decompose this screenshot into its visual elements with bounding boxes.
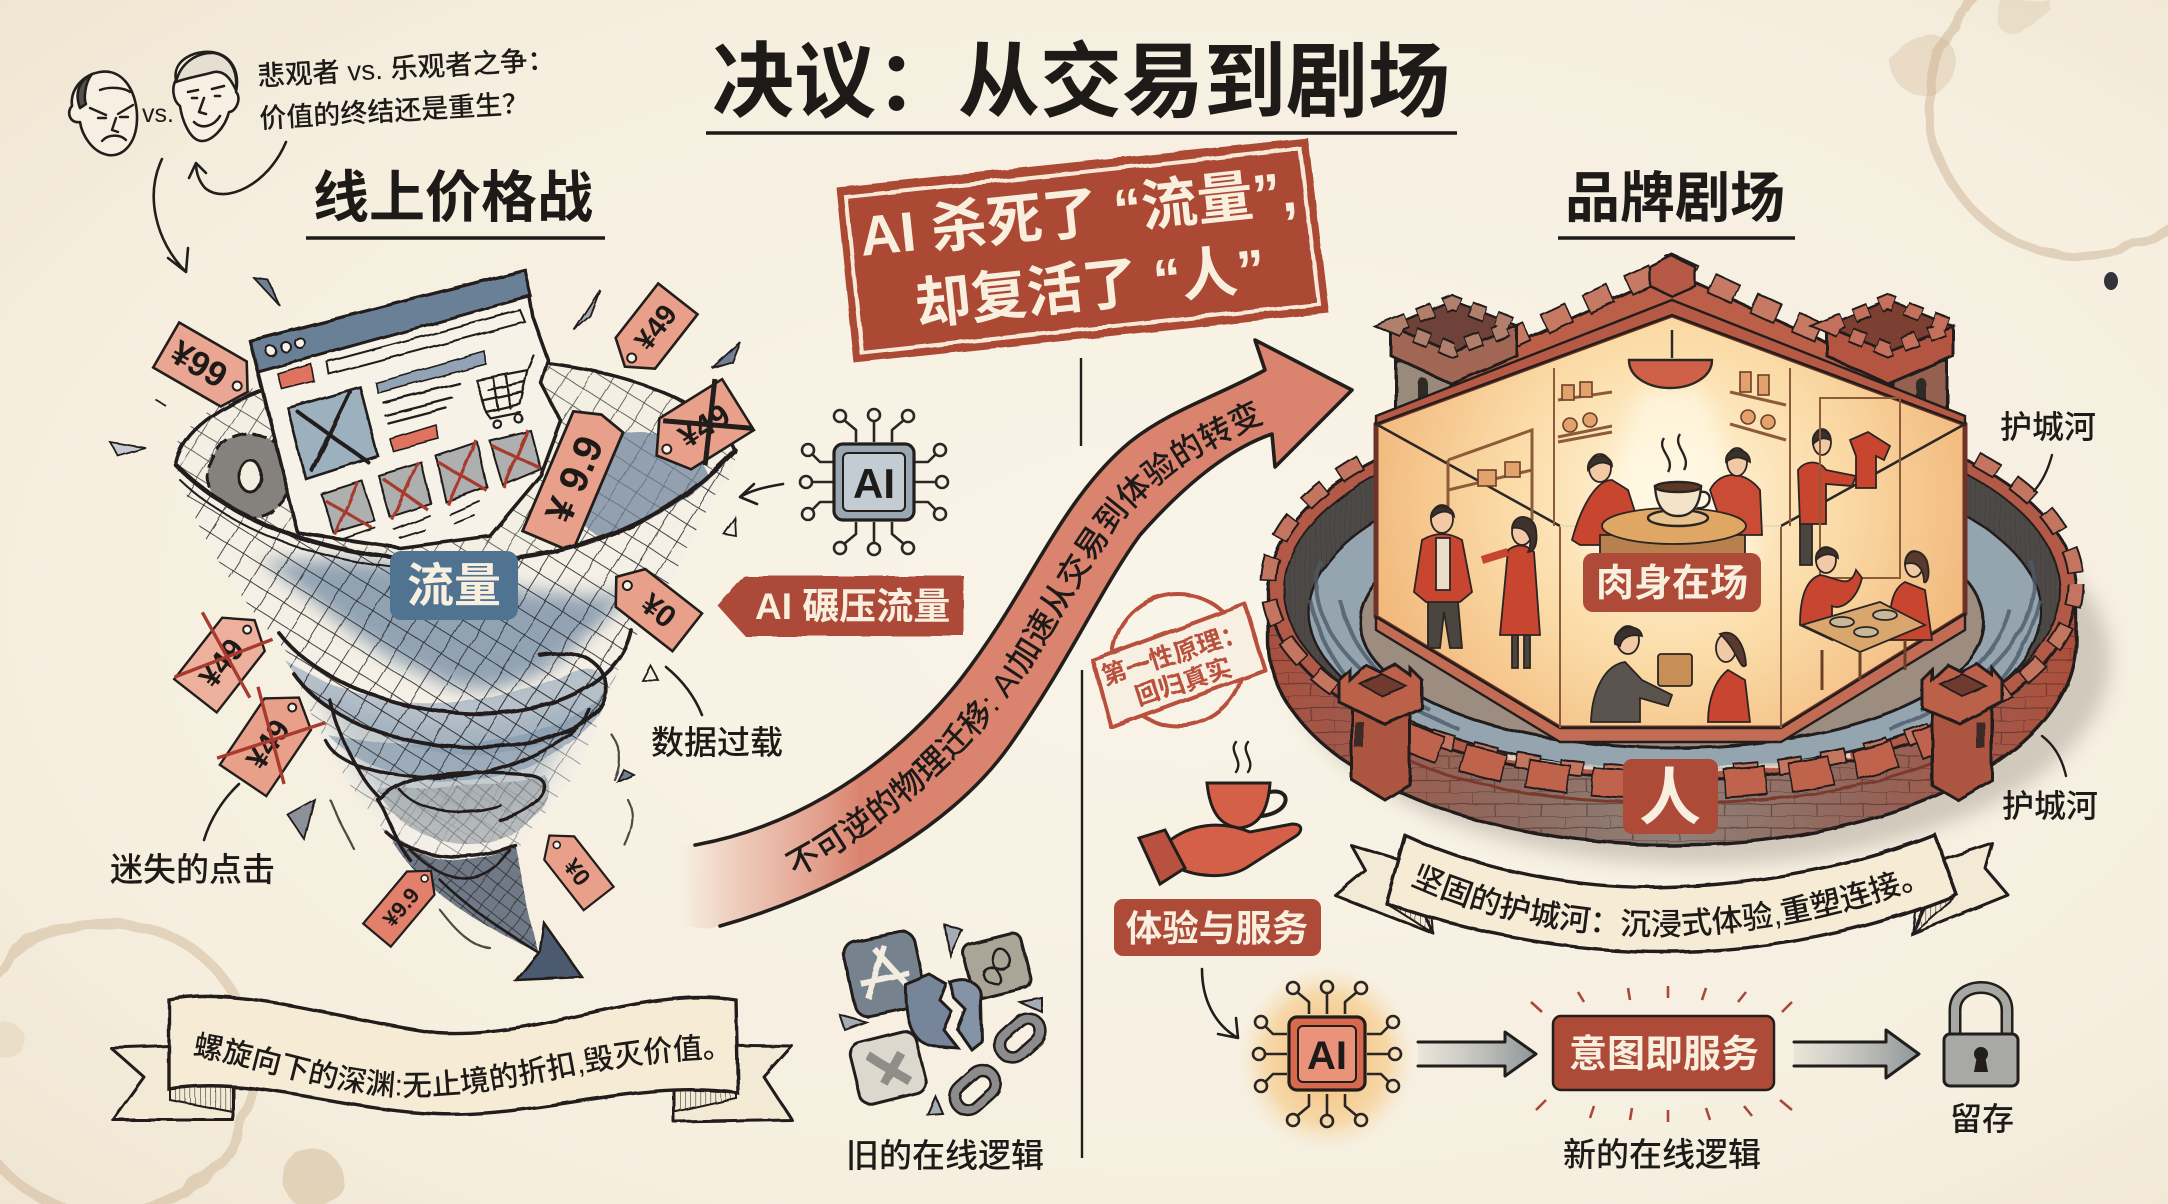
outer wall — [1268, 590, 2076, 845]
title: 决议：从交易到剧场 — [712, 37, 1450, 128]
front merlons — [1402, 735, 1945, 785]
label pill: traffic: 流量 — [407, 559, 501, 612]
shards — [110, 278, 740, 840]
label box: people: 人 — [1639, 764, 1701, 833]
label: old online logic: 旧的在线逻辑 — [846, 1137, 1044, 1174]
label pill: physically present: 肉身在场 — [1596, 563, 1748, 605]
icon: shopping cart — [476, 356, 534, 428]
ribbon: spiral abyss: 螺旋向下的深渊:无止境的折扣,毁灭价值。 — [194, 1032, 714, 1098]
label: moat bottom — [2002, 736, 2098, 824]
icon: optimist face — [173, 52, 238, 141]
arrow: chip to intent — [1418, 1032, 1536, 1076]
stamp: first principles — [1093, 594, 1265, 727]
stamp: first principles: 第一性原理： — [1098, 618, 1249, 691]
ribbon: spiral abyss — [110, 994, 794, 1124]
label: moat top — [2000, 409, 2096, 491]
people: gift exchange — [1591, 626, 1750, 722]
caption: 悲观者 vs. 乐观者之争： — [257, 44, 556, 92]
broken chain — [949, 1013, 1046, 1115]
pessimist vs optimist note: 价值的终结还是重生？ — [259, 88, 530, 134]
bandage tile — [847, 1029, 929, 1107]
funnel front — [176, 450, 735, 980]
people: left pane pair — [1414, 505, 1540, 668]
box: intent is service: 意图即服务 — [1569, 1034, 1759, 1076]
label pill: experience and service: 体验与服务 — [1126, 908, 1308, 949]
label: lost clicks: 迷失的点击 — [110, 851, 275, 888]
front right tower — [1932, 705, 1992, 800]
right tower crown — [1827, 326, 1953, 384]
tag: crossed ¥49: ¥49 — [672, 396, 736, 455]
back merlons — [1268, 394, 2076, 774]
heading: online price war: 线上价格战 — [313, 166, 593, 229]
center divider — [1081, 358, 1082, 1158]
icon: padlock — [1944, 988, 2018, 1086]
label pill: physically present — [1583, 553, 1761, 612]
gear — [208, 434, 292, 518]
left tower crown — [1391, 326, 1517, 384]
tag: ¥49 — [605, 284, 698, 382]
arrow: down to tornado — [154, 159, 188, 272]
tag: ¥0 small: ¥0 — [558, 854, 595, 891]
spiral arrowhead — [516, 923, 582, 980]
tag: ¥9.9 large: ¥ 9.9 — [537, 430, 613, 529]
arrow: back to optimist — [189, 142, 286, 194]
heading: brand theatre: 品牌剧场 — [1565, 167, 1785, 229]
AI chip: AI — [853, 460, 895, 507]
tag: crossed ¥49 — [639, 376, 756, 484]
icon: coffee cup with steam — [1648, 434, 1710, 526]
tag: ¥99: ¥99 — [164, 333, 234, 396]
big transition arrow — [691, 338, 1392, 966]
tag: crossed ¥49 left: ¥49 — [192, 632, 251, 694]
ink dot — [2104, 272, 2118, 290]
label: data overload — [651, 667, 783, 761]
fragments — [840, 925, 1042, 1115]
ribbon: strong moat — [1334, 832, 2010, 954]
browser window — [250, 270, 561, 548]
label pill: traffic — [390, 551, 518, 620]
tag: AI crushes traffic: AI 碾压流量 — [755, 586, 950, 627]
label pill: experience and service — [1114, 899, 1321, 956]
front left tower — [1352, 705, 1410, 800]
infinity tile — [961, 932, 1033, 1000]
people: coffee table — [1572, 448, 1762, 560]
shelves — [1448, 392, 1786, 520]
red stamp banner: AI 杀死了 “流量”, — [857, 159, 1299, 268]
broken tile — [906, 975, 958, 1048]
label: retention: 留存 — [1950, 1101, 2014, 1137]
tag: ¥0 — [602, 558, 702, 651]
stamp: first principles: 回归真实 — [1132, 654, 1235, 711]
tag: ¥49: ¥49 — [629, 299, 684, 357]
rim front — [176, 450, 735, 562]
label: moat top: 护城河 — [2000, 409, 2096, 445]
label: moat bottom: 护城河 — [2002, 788, 2098, 824]
icon: hand holding cup — [1139, 742, 1301, 884]
arrow: intent to retention — [1794, 1030, 1919, 1078]
pessimist vs optimist note — [69, 44, 556, 272]
label: data overload: 数据过载 — [651, 724, 783, 761]
ground shadow — [1290, 455, 2110, 865]
tag: ¥9.9 small — [363, 859, 445, 947]
back merlons outline — [1268, 394, 2076, 774]
label: new online logic: 新的在线逻辑 — [1563, 1136, 1761, 1173]
front merlons outline — [1402, 735, 1945, 785]
tag: ¥99 — [153, 322, 261, 415]
tag: ¥9.9 small: ¥9.9 — [378, 883, 425, 932]
hexagonal room — [1376, 300, 1965, 742]
tag: ¥0: ¥0 — [634, 586, 683, 635]
tag: ¥9.9 large — [523, 404, 626, 552]
tag: crossed ¥49 second — [210, 675, 329, 801]
label box: people — [1623, 759, 1718, 834]
icon: pessimist face — [69, 72, 137, 155]
tornado illustration — [110, 270, 756, 980]
tag: ¥0 small — [534, 824, 614, 910]
people: dining — [1800, 547, 1932, 690]
moat — [1309, 454, 2041, 770]
label: lost clicks — [110, 784, 275, 888]
back roof wall — [1455, 272, 1890, 400]
new online logic flow — [1239, 966, 2018, 1173]
box: intent is service — [1531, 986, 1792, 1122]
vs label: vs. — [142, 100, 174, 128]
AI chip warm — [1239, 966, 1415, 1150]
icon group: old online logic — [840, 925, 1046, 1115]
lamp — [1629, 330, 1712, 388]
app tile — [842, 929, 928, 1019]
tag: AI crushes traffic — [718, 576, 964, 636]
AI chip — [800, 409, 948, 555]
people: shirt browsing — [1798, 398, 1900, 578]
island base — [1360, 496, 1984, 748]
spotlight — [1585, 390, 1760, 560]
red stamp banner — [836, 138, 1329, 363]
red stamp banner: 却复活了 “人” — [912, 237, 1268, 336]
big transition arrow: 不可逆的物理迁移: AI加速从交易到体验的转变 — [784, 400, 1264, 872]
castle illustration — [1268, 256, 2110, 865]
arrow: service to AI — [1202, 969, 1238, 1038]
ribbon: strong moat: 坚固的护城河：沉浸式体验,重塑连接。 — [1411, 863, 1912, 938]
spiral bands — [285, 660, 607, 755]
arrow: AI to funnel — [740, 484, 783, 504]
tag: crossed ¥49 second: ¥49 — [239, 713, 297, 775]
inner wall face — [1284, 412, 2060, 768]
AI chip warm: AI — [1307, 1034, 1347, 1078]
tag: crossed ¥49 left — [159, 592, 289, 723]
funnel back rim — [175, 358, 735, 558]
back towers — [1396, 361, 1451, 430]
